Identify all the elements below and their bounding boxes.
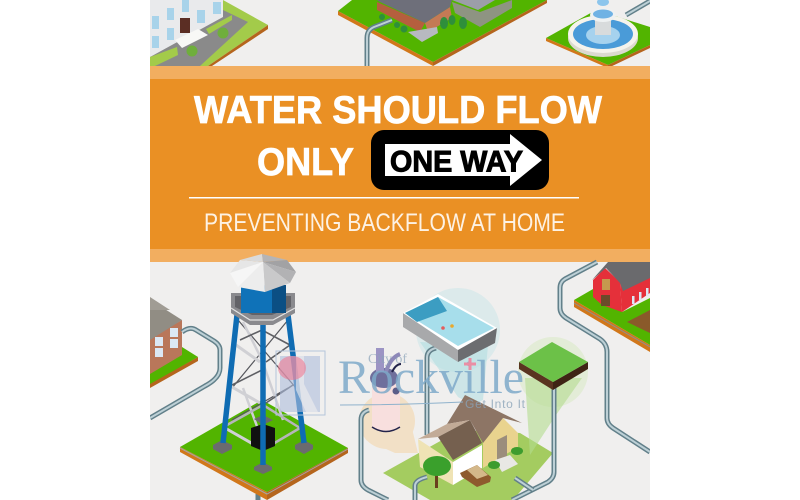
grass highlight and beam [518, 337, 588, 455]
blue legs [223, 315, 304, 465]
wordmark: Rockville [338, 351, 524, 404]
diagonal lattice [232, 320, 296, 420]
tank body [241, 285, 286, 313]
watermark logo: Rockville [276, 351, 526, 415]
subtitle: PREVENTING BACKFLOW AT HOME [204, 209, 565, 237]
water tower [180, 254, 348, 500]
pipe from left house [150, 328, 220, 418]
water heater tank [370, 348, 401, 432]
house lawn [383, 430, 553, 500]
concrete pads [213, 440, 313, 474]
logo mark [276, 351, 325, 415]
gallery deck [231, 293, 295, 325]
title line 1: WATER SHOULD FLOW [194, 89, 602, 132]
pipe from pool to house [427, 348, 436, 435]
top-left office building on lawn [150, 0, 268, 66]
ladder rings [225, 345, 260, 448]
pipe below tower [256, 494, 260, 500]
city of: City of [368, 352, 407, 367]
fountain on lawn [546, 0, 650, 68]
one way sign [371, 130, 549, 190]
pipe from grass [512, 388, 554, 500]
pipe from heater [361, 410, 388, 500]
house service pipes [415, 477, 533, 500]
left house on lawn [150, 297, 198, 388]
grass block [519, 342, 588, 390]
car [460, 465, 491, 487]
swimming pool [403, 294, 497, 362]
top-centre commercial buildings on lawn [338, 0, 547, 66]
cross [464, 358, 476, 370]
lawn base [180, 400, 348, 500]
orange title banner [150, 66, 650, 262]
pipe top right [626, 1, 650, 15]
tree [423, 456, 451, 488]
long pipe from barn [560, 262, 650, 452]
pipe from commercial building [367, 20, 392, 66]
title line 2: ONLY [257, 141, 354, 184]
water heater highlight circle [359, 393, 418, 453]
tagline: Get Into It [465, 397, 526, 411]
barn on lawn [574, 262, 650, 352]
house [418, 395, 523, 488]
one way sign: ONE WAY [390, 146, 523, 178]
conical roof [230, 254, 296, 292]
pool highlight circle and beam [416, 288, 500, 405]
